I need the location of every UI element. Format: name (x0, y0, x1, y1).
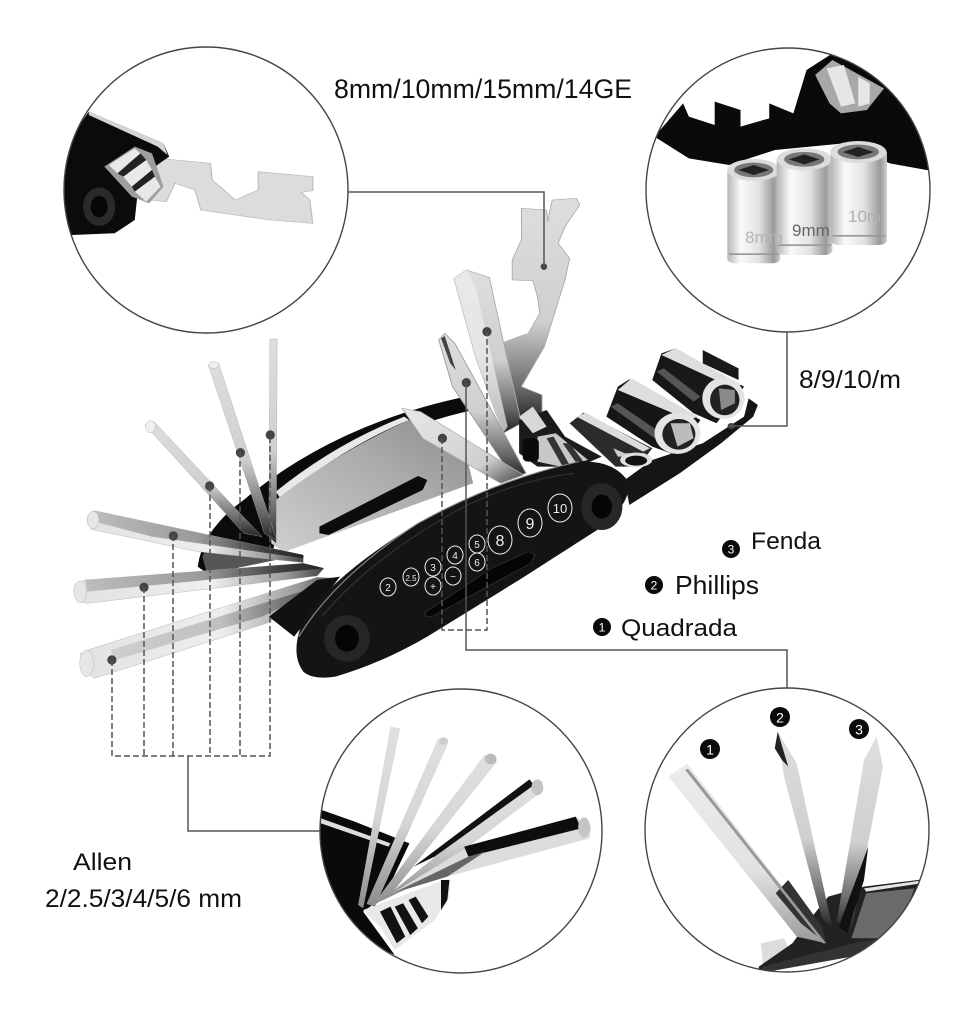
handle size markings: 5 (474, 540, 480, 551)
folding coil (519, 407, 602, 467)
handle size markings (380, 494, 572, 596)
label: Quadrada: Quadrada (621, 615, 738, 642)
dashed leader lines: driver bits (442, 332, 487, 630)
circle: sockets detail (646, 48, 936, 332)
connector: Allen keys to circle (188, 756, 320, 831)
key pivot (202, 543, 276, 573)
socket 9 (606, 378, 700, 455)
pointer dots on tools (107, 263, 735, 665)
central multi-tool (74, 198, 758, 678)
allen key 5 (74, 563, 324, 603)
handle size markings: 4 (452, 551, 458, 562)
allen key 6 (80, 577, 338, 678)
handle size markings: 8 (496, 533, 505, 550)
handle size markings: 10 (553, 501, 567, 516)
connector: sockets to circle (730, 332, 787, 426)
connector: spanner to circle (348, 192, 544, 267)
label: spanner sizes: 8mm/10mm/15mm/14GE (334, 74, 632, 104)
connector: bits to circle (466, 383, 787, 688)
label: Quadrada: 1 (599, 620, 606, 634)
circle: Allen keys detail (317, 689, 602, 973)
phillips bit (439, 333, 526, 477)
label: Phillips: Phillips (675, 570, 759, 600)
handle bolts (324, 483, 622, 662)
black handle (269, 462, 629, 678)
handle size markings: 3 (430, 563, 436, 574)
label: socket sizes: 8/9/10/m (799, 366, 901, 394)
allen key 4 (87, 511, 303, 563)
number badge 3: 3 (855, 722, 863, 738)
circle: sockets detail: 9mm (792, 221, 830, 240)
square driver bit (454, 270, 521, 433)
number badge 2 (770, 707, 790, 727)
label: Fenda: Fenda (751, 528, 822, 555)
handle size markings: 9 (526, 516, 535, 533)
number badge 2: 2 (776, 710, 784, 726)
circle: sockets detail: 10m (848, 207, 881, 226)
handle size markings: 2.5 (405, 574, 417, 583)
handle size markings: 2 (385, 583, 391, 594)
label: Allen: Allen (73, 849, 132, 876)
socket 10 (652, 348, 745, 423)
flat bit (402, 408, 524, 483)
circle: spanner detail (57, 47, 348, 333)
socket holder (625, 350, 758, 505)
handle size markings: 6 (474, 558, 480, 569)
label: Fenda (722, 528, 822, 558)
number badge 1: 1 (706, 742, 714, 758)
circle: screwdriver bits detail (645, 688, 929, 973)
spanner blade (501, 198, 580, 423)
number badge 1 (700, 739, 720, 759)
label: Fenda: 3 (728, 542, 735, 556)
handle size markings: + (430, 582, 436, 593)
circle: sockets detail: 8mm (745, 228, 783, 247)
number badge 3 (849, 719, 869, 739)
label: Allen sizes: 2/2.5/3/4/5/6 mm (45, 885, 242, 913)
handle size markings: − (450, 572, 456, 583)
thin allen keys (145, 339, 277, 543)
socket 8 (570, 413, 652, 467)
back plate (198, 396, 473, 577)
label: Phillips: 2 (651, 578, 658, 592)
dashed leader lines: Allen keys (112, 435, 270, 756)
